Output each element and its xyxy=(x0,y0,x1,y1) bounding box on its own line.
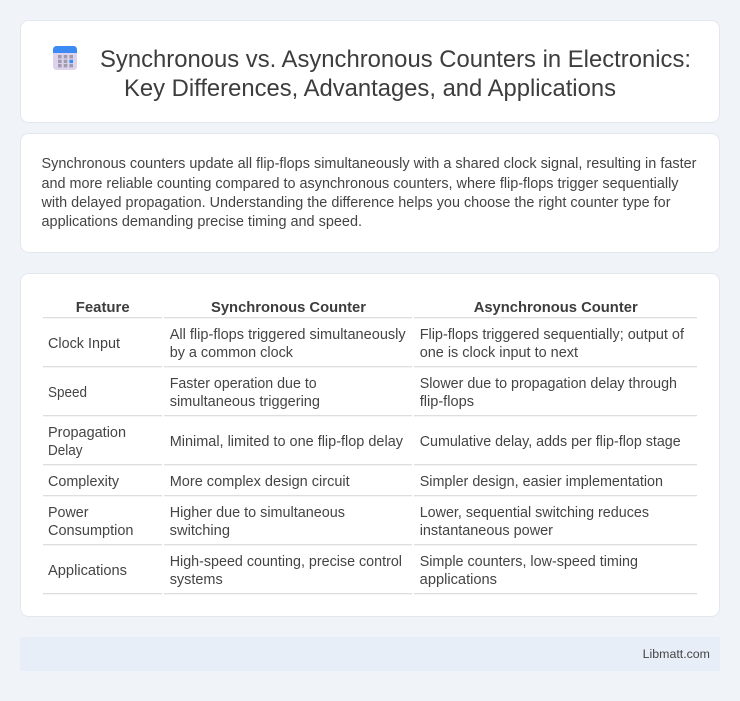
table row: power consumption: switching xyxy=(170,523,230,539)
table row: speed: Faster operation due to xyxy=(170,376,317,392)
title: Key Differences, Advantages, and Applications xyxy=(124,75,616,102)
footer bar xyxy=(20,637,720,671)
table header row: Asynchronous Counter xyxy=(474,299,638,316)
table header row: Feature xyxy=(76,299,130,316)
table row: power consumption: Lower, sequential switching reduces xyxy=(420,505,649,521)
text block: introduction paragraph: applications demanding precise timing and speed. xyxy=(42,214,362,230)
table row: power consumption: Consumption xyxy=(48,523,134,539)
text block: introduction paragraph: with delayed propagation. Understanding the difference helps you choose the right counter type for xyxy=(41,195,671,211)
table row: applications: applications xyxy=(420,572,497,588)
table row: clock input: one is clock input to next xyxy=(420,345,578,361)
table row: propagation delay: Delay xyxy=(48,443,83,459)
table row: complexity: Simpler design, easier implementation xyxy=(420,474,663,490)
table row: propagation delay: Propagation xyxy=(48,425,126,441)
table row: propagation delay: Minimal, limited to one flip-flop delay xyxy=(170,434,404,450)
panel: title card xyxy=(20,20,720,122)
table row: speed: Speed xyxy=(48,385,87,401)
title: Synchronous vs. Asynchronous Counters in Electronics: xyxy=(100,46,691,73)
table row: applications: systems xyxy=(170,572,223,588)
table row: power consumption xyxy=(43,505,697,545)
panel: introduction xyxy=(20,134,720,252)
table row: speed xyxy=(43,376,697,416)
table row: speed: Slower due to propagation delay through xyxy=(420,376,677,392)
title xyxy=(100,46,691,102)
table row: applications: High-speed counting, precise control xyxy=(170,554,402,570)
table row: power consumption: Higher due to simultaneous xyxy=(170,505,345,521)
text block: introduction paragraph xyxy=(41,156,697,230)
table row: propagation delay: Cumulative delay, adds per flip-flop stage xyxy=(420,434,681,450)
table row: applications xyxy=(43,554,697,594)
table row: complexity xyxy=(43,474,697,496)
table row: clock input: Flip-flops triggered sequentially; output of xyxy=(420,327,685,343)
table header row: Synchronous Counter xyxy=(211,299,366,316)
table header row xyxy=(43,299,697,318)
table row: complexity: Complexity xyxy=(48,474,120,490)
table row: clock input: All flip-flops triggered simultaneously xyxy=(170,327,406,343)
footer bar: Libmatt.com xyxy=(643,647,710,661)
table row: power consumption: instantaneous power xyxy=(420,523,553,539)
table row: clock input: Clock Input xyxy=(48,336,120,352)
table row: applications: Simple counters, low-speed timing xyxy=(420,554,638,570)
table row: clock input: by a common clock xyxy=(170,345,294,361)
table row: applications: Applications xyxy=(48,563,127,579)
table row: speed: simultaneous triggering xyxy=(170,394,320,410)
table row: power consumption: Power xyxy=(48,505,89,521)
table row: clock input xyxy=(43,327,697,367)
icon: calendar grid xyxy=(53,46,77,70)
table row: complexity: More complex design circuit xyxy=(170,474,350,490)
table row: speed: flip-flops xyxy=(420,394,474,410)
text block: introduction paragraph: and more reliable counting compared to asynchronous counters, where flip-flops trigger sequentially xyxy=(42,176,679,192)
table row: propagation delay xyxy=(43,425,697,465)
text block: introduction paragraph: Synchronous counters update all flip-flops simultaneously with a shared clock signal, resulting in faster xyxy=(42,156,697,172)
panel: comparison table xyxy=(20,274,720,616)
